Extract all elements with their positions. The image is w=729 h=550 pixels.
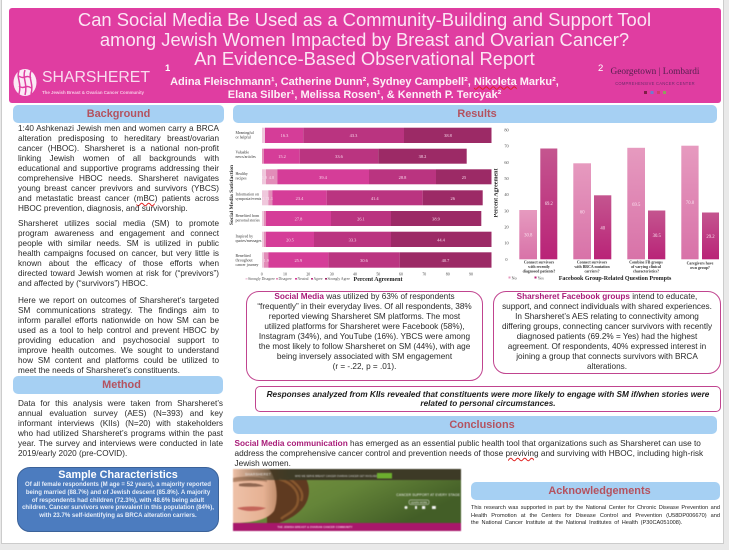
x axis ticks (261, 272, 473, 276)
text block: Acknowledgements: Health Promotion at the Centers for Disease Control and Prevention (U58DP006670) and (471, 512, 720, 518)
legend: Yes (538, 275, 544, 280)
paragraph 1: comprehensive HBOC needs. Sharsheret navigates (18, 174, 219, 183)
y axis ticks: 60 (504, 160, 509, 165)
paragraph 1: young breast cancer previvors and survivors (YBCS) (18, 184, 219, 193)
bar value labels: 30.6 (360, 258, 369, 263)
callout: social media: Social Media was utilized by 63% of respondents (274, 292, 455, 301)
text block: Conclusions: Jewish women. (234, 459, 291, 468)
bar value labels: 69.2 (545, 202, 554, 207)
bar value labels: 30.5 (653, 234, 661, 239)
paragraph 3: improve health outcomes. We sought to understand (18, 346, 219, 354)
heading: Background (13, 105, 224, 123)
heading: Results (233, 105, 717, 123)
x axis ticks: 70 (422, 272, 426, 276)
paragraph 2: health campaigns focused on cancer, but very little is (18, 249, 219, 258)
category labels (523, 260, 714, 274)
paragraph 2: and affected by (“survivors”) HBOC. (18, 279, 148, 288)
bar chart: Facebook group prompts (494, 128, 719, 282)
bars (262, 128, 492, 268)
paragraph 3: inform parallel efforts nationwide on how SM can be (18, 316, 219, 324)
text block: Method: year. The survey and interviews were conducted in late (18, 439, 223, 448)
category labels: with recently (528, 265, 550, 269)
paragraph 2: program awareness and engagement and connect (18, 229, 219, 238)
text block: Method: informant interviews (KIIs) (N=20) with stakeholders (18, 419, 223, 428)
bar value labels: 26 (451, 196, 456, 201)
text block: Conclusions: Social Media communication has emerged as an essential public health tool that organizations such as Sharsheret can use to (234, 439, 701, 448)
text block: Background (18, 124, 219, 374)
bar value labels: 25 (462, 175, 467, 180)
bar value labels: 43.3 (350, 133, 358, 138)
paragraph 1: linking Jewish women of all backgrounds with (18, 154, 219, 163)
category labels: Caregivers have (687, 262, 714, 266)
bar value labels: 20.5 (286, 237, 295, 242)
y axis title: Social Media Satisfaction (229, 164, 235, 225)
paragraph 2: directed toward Jewish women at risk for (“previvors”) (18, 269, 219, 278)
bar value labels: 2.7 (262, 196, 269, 201)
paragraph 2: known about the efficacy of those efforts when (18, 259, 219, 268)
bar value labels: 33.6 (335, 154, 344, 159)
callout: social media: utilized platforms for Sharsheret were Facebook (58%), (264, 322, 465, 331)
x axis ticks: 20 (306, 272, 310, 276)
bar value labels: 30.8 (524, 234, 533, 238)
callout: Facebook groups (493, 291, 721, 374)
bar value labels (262, 133, 467, 263)
text block: Method: Data for this analysis were taken from Sharsheret’s (18, 399, 223, 408)
bar value labels: 1.9 (263, 258, 270, 263)
callout: social media: being inversely associated with SM engagement (277, 352, 452, 361)
paragraph 3 (18, 296, 219, 374)
logo dots (644, 91, 666, 94)
text block: Conclusions: address the comprehensive cancer control and prevention needs of those previving and surviving with HBOC, including high-risk (234, 449, 703, 458)
callout: Facebook groups: diagnosed patients (69.2% = Yes) had the highest (517, 332, 697, 341)
x axis ticks: 80 (446, 272, 450, 276)
paragraph 1: and metastatic breast cancer (mBC) patients across (18, 194, 219, 203)
category labels: of varying clinical (631, 265, 662, 269)
callout: social media: (r = -.22, p = .01). (333, 362, 396, 371)
legend: Disagree (278, 277, 292, 281)
logo subtitle: COMPREHENSIVE CANCER CENTER (615, 81, 695, 86)
x axis ticks: 40 (353, 272, 357, 276)
logo wordmark: SHARSHERET (42, 69, 150, 86)
heading: Results: Results (457, 108, 497, 120)
bar value labels: 23.4 (296, 196, 304, 201)
heading: Acknowledgements (471, 482, 720, 500)
text block: sample characteristics: with 23.7% self-identifying as BRCA alteration carriers. (39, 513, 197, 519)
bar value labels: 39.4 (319, 175, 328, 180)
category labels: personal stories (236, 218, 260, 222)
paragraph 3: how SM content and platforms could be utilized to (18, 356, 219, 364)
category labels: with BRCA mutation (574, 265, 610, 269)
paragraph 3: meet the needs of Sharsheret’s constituents. (18, 366, 180, 374)
hair (267, 469, 309, 523)
y axis ticks: 20 (504, 224, 509, 230)
text block: Acknowledgements: This research was supported in part by the National Center for Chronic Disease Prevention and (471, 505, 720, 511)
legend: Agree (314, 277, 323, 281)
bar value labels: 38.8 (444, 133, 453, 138)
bar value labels: 1.9 (262, 175, 268, 180)
callout: social media (246, 291, 483, 381)
icon: Sharsheret emblem (14, 69, 36, 96)
x axis ticks: 60 (399, 272, 403, 276)
category labels: Information on (236, 192, 259, 196)
category labels: own group? (690, 266, 710, 270)
heading: Conclusions (233, 416, 717, 434)
x axis ticks: 30 (330, 272, 334, 276)
text block: sample characteristics: Of all female respondents (M age = 52 years), a majority reported (25, 482, 211, 488)
category labels: Inspired by (236, 234, 253, 238)
bar value labels: 40 (600, 226, 606, 232)
paragraph 2 (18, 219, 219, 288)
panel: sample characteristics (17, 467, 219, 532)
category labels: quotes/messages (236, 239, 262, 243)
paragraph 3: used as a tool to help control and prevent HBOC by (18, 326, 219, 334)
bar value labels: 15.2 (278, 154, 286, 159)
title: Can Social Media Be Used as a Community-Building and Support Tool (78, 9, 651, 30)
logo: Sharsheret (14, 63, 170, 96)
paragraph 3: SM communications strategy. The findings aim to (18, 306, 219, 314)
text block: Acknowledgements: the National Cancer Institute at the National Institutes of Health (P30CA051008). (471, 520, 682, 526)
legend: Strongly Agree (328, 277, 350, 281)
category labels: Benefited from (236, 214, 259, 218)
paragraph 3: Here we report on outcomes of Sharsheret’s targeted (18, 296, 219, 304)
bar value labels: 70.8 (686, 201, 695, 206)
callout: Facebook groups: differing groups, connecting cancer survivors with recently (502, 322, 712, 331)
x axis title: Percent Agreement (354, 277, 402, 283)
x axis ticks: 50 (376, 272, 380, 276)
callout: social media: Instagram (34%), and YouTube (16%). YBCS were among (259, 332, 470, 341)
superscript 2: 2 (598, 63, 603, 74)
bar value labels: 29.2 (706, 235, 715, 240)
category labels: carriers? (584, 270, 600, 274)
title: among Jewish Women Impacted by Breast and Ovarian Cancer? (100, 28, 629, 50)
heading: Method: Method (102, 379, 141, 391)
bar value labels: 4.8 (269, 175, 275, 180)
authors: Adina Fleischmann¹, Catherine Dunn², Sydney Campbell², Nikoleta Marku², (170, 76, 559, 88)
paragraph 3: providing education and psychosocial support to (18, 336, 219, 344)
category labels: Connect survivors (577, 260, 608, 264)
legend (246, 277, 350, 281)
image: Sharsheret website screenshot (232, 468, 462, 532)
bar value labels: 25.9 (294, 258, 303, 263)
category labels: Healthy (236, 172, 248, 176)
screenshot social icons (404, 506, 436, 509)
bar value labels: 69.5 (632, 203, 641, 208)
screenshot button (409, 500, 429, 505)
text block: Method: who had utilized Sharsheret’s programs within the past (18, 429, 223, 438)
x axis ticks: 90 (469, 272, 473, 276)
screenshot button: LEARN MORE (411, 502, 428, 505)
callout: social media: reported viewing Sharsheret SM platforms. The most (269, 312, 460, 321)
category labels: cancer journey (236, 263, 259, 267)
category labels: characteristics? (633, 270, 659, 274)
callout: social media: the most likely to follow Sharsheret on SM (44%), with age (259, 342, 470, 351)
text block: Method: 2019/early 2020 (pre-COVID). (18, 449, 127, 458)
legend: Neutral (298, 277, 309, 281)
paragraph 1: cancer (HBOC). Sharsheret is a national non-profit (18, 144, 219, 153)
paragraph 1: alteration predisposing to hereditary breast/ovarian (18, 134, 219, 143)
authors: Elana Silber¹, Melissa Rosen¹, & Kenneth P. Tercyak² (228, 88, 501, 100)
bar value labels: 27.8 (295, 216, 303, 222)
y axis ticks: 30 (504, 208, 509, 213)
screenshot logo text: SHARSHERET (245, 472, 271, 476)
bar value labels: 16.3 (281, 133, 289, 138)
bar value labels: 26.1 (357, 216, 365, 222)
heading: Background: Background (87, 108, 150, 120)
screenshot headline: CANCER SUPPORT AT EVERY STAGE (396, 493, 461, 497)
bar value labels: 38.2 (419, 154, 426, 159)
x axis ticks: 0 (261, 272, 263, 276)
category labels: recipes (236, 176, 247, 180)
callout: social media: “frequently” in their everyday lives. Of all respondents, 38% (257, 302, 472, 311)
callout: KII responses (255, 386, 721, 412)
top navigation band (233, 469, 461, 480)
category labels: news/articles (236, 155, 256, 159)
x axis ticks: 10 (283, 272, 287, 276)
bar chart: social media satisfaction (229, 128, 492, 283)
paragraph 1 (18, 124, 219, 213)
category labels: throughout (236, 258, 253, 262)
screenshot footer text: THE JEWISH BREAST & OVARIAN CANCER COMMUNITY (277, 525, 353, 529)
paragraph 1: educational and supportive programs addressing their (18, 164, 219, 173)
callout: KII responses: related to personal circumstances. (420, 399, 556, 408)
callout: Facebook groups: support, and connect individuals with shared experiences. (502, 302, 712, 311)
bar value labels: 38.9 (432, 216, 441, 222)
heading: sample characteristics: Sample Characteristics (58, 469, 178, 481)
category labels: Combine FB groups (629, 260, 663, 264)
bar value labels: 28.8 (399, 175, 407, 180)
callout: Facebook groups: Sharsheret Facebook groups intend to educate, (517, 292, 697, 301)
bar value labels (524, 201, 715, 240)
header banner (9, 8, 721, 103)
callout: Facebook groups: joining a group that connects survivors with BRCA (516, 352, 698, 361)
paragraph 2: people with similar needs. SM is utilized in public (18, 239, 219, 248)
logo wordmark: Georgetown | Lombardi (611, 67, 699, 77)
category labels: Benefited (236, 254, 251, 258)
logo tagline: The Jewish Breast & Ovarian Cancer Community (42, 90, 144, 94)
callout: Facebook groups: In Sharsheret’s AES relating to connectivity among (515, 312, 699, 321)
y axis ticks: 40 (504, 192, 509, 197)
text block: Method (18, 399, 223, 458)
category labels (236, 131, 262, 267)
callout: Facebook groups: alterations. (587, 362, 627, 371)
y axis ticks (504, 128, 509, 262)
bar value labels: 33.3 (349, 237, 357, 242)
text block: sample characteristics: of respondents had children (72.3%), with 48.6% being adult (32, 498, 204, 504)
text block: sample characteristics (22, 482, 214, 519)
legend: No (512, 275, 517, 280)
category labels: Valuable (236, 150, 249, 154)
bar value labels: 60 (580, 210, 585, 216)
logo: Georgetown Lombardi (610, 67, 700, 94)
title (78, 9, 651, 69)
callout: KII responses: Responses analyzed from KIIs revealed that constituents were more likely to engage with SM if/when stories were (267, 390, 709, 398)
callout: Facebook groups: agreement. Of respondents, 40% expressed interest in (508, 342, 706, 351)
x axis title: Facebook Group-Related Question Prompts (559, 276, 672, 282)
bar value labels: 40.7 (442, 258, 450, 263)
text block: Method: annual evaluation survey (AES) (N=393) and key (18, 409, 223, 418)
bar value labels: 1.1 (268, 196, 273, 201)
superscript 1: 1 (165, 63, 170, 74)
category labels: Meaningful (236, 131, 254, 135)
heading: Conclusions: Conclusions (449, 419, 515, 431)
category labels: diagnosed patients? (523, 270, 555, 274)
y axis ticks: 10 (504, 241, 509, 246)
bar value labels: 44.4 (437, 237, 446, 242)
screenshot nav text: WHO WE SERVE BREAST CANCER OVARIAN CANCER GET INVOLVED (295, 475, 378, 478)
category labels: symposia/events (236, 197, 262, 201)
category labels: or helpful (236, 136, 251, 140)
authors (170, 76, 559, 100)
y axis ticks: 50 (504, 176, 509, 181)
legend: Strongly Disagree (248, 277, 275, 281)
face (233, 469, 277, 523)
text block: Acknowledgements (471, 505, 720, 526)
paragraph 1: HBOC prevention, diagnosis, and survivorship. (18, 204, 188, 213)
text block: sample characteristics: children. Cancer survivors were prevalent in this population (84%), (22, 505, 214, 511)
text block: sample characteristics: being married (88.7%) and of Jewish descent (85.8%). A majority (26, 490, 210, 496)
title: An Evidence-Based Observational Report (194, 48, 535, 69)
y axis ticks: 0 (505, 257, 508, 262)
bars (519, 146, 719, 259)
category labels: Connect survivors (524, 260, 555, 264)
paragraph 2: Sharsheret utilizes social media (SM) to promote (18, 219, 219, 228)
bar value labels: 41.4 (371, 196, 379, 201)
y axis ticks: 80 (504, 128, 509, 132)
y axis ticks: 70 (504, 144, 509, 149)
heading: Acknowledgements: Acknowledgements (548, 485, 651, 497)
heading: Method (13, 376, 223, 394)
paragraph 1: 1:40 Ashkenazi Jewish men and women carry a BRCA (18, 124, 219, 133)
text block: Conclusions (234, 439, 704, 468)
legend (508, 275, 544, 280)
